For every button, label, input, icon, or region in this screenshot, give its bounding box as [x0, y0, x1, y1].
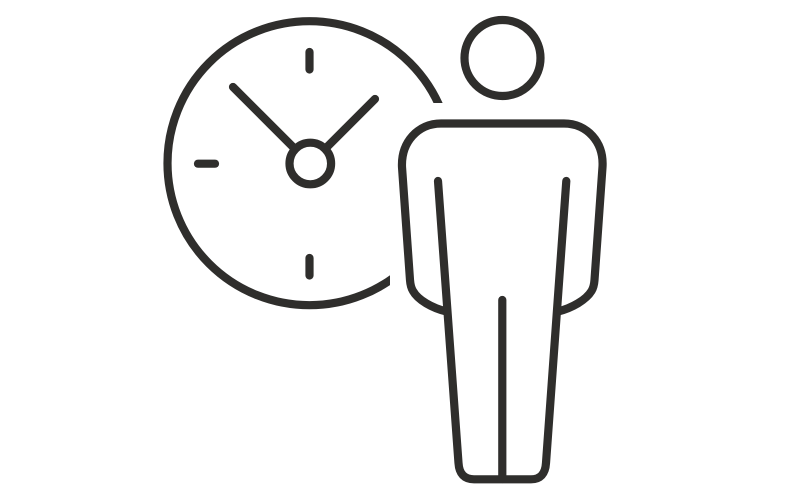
clock centre hub	[290, 143, 331, 184]
icon: person	[402, 20, 603, 479]
icon: clock	[168, 21, 452, 305]
clock face arc	[168, 21, 452, 305]
person head	[464, 20, 540, 96]
person shoulders and arms	[402, 124, 603, 312]
icon: person standing beside a clock	[163, 16, 607, 484]
person leg divider	[498, 300, 506, 479]
person torso and legs	[438, 181, 566, 479]
clock hands	[233, 87, 375, 147]
clock hour ticks	[198, 52, 310, 276]
